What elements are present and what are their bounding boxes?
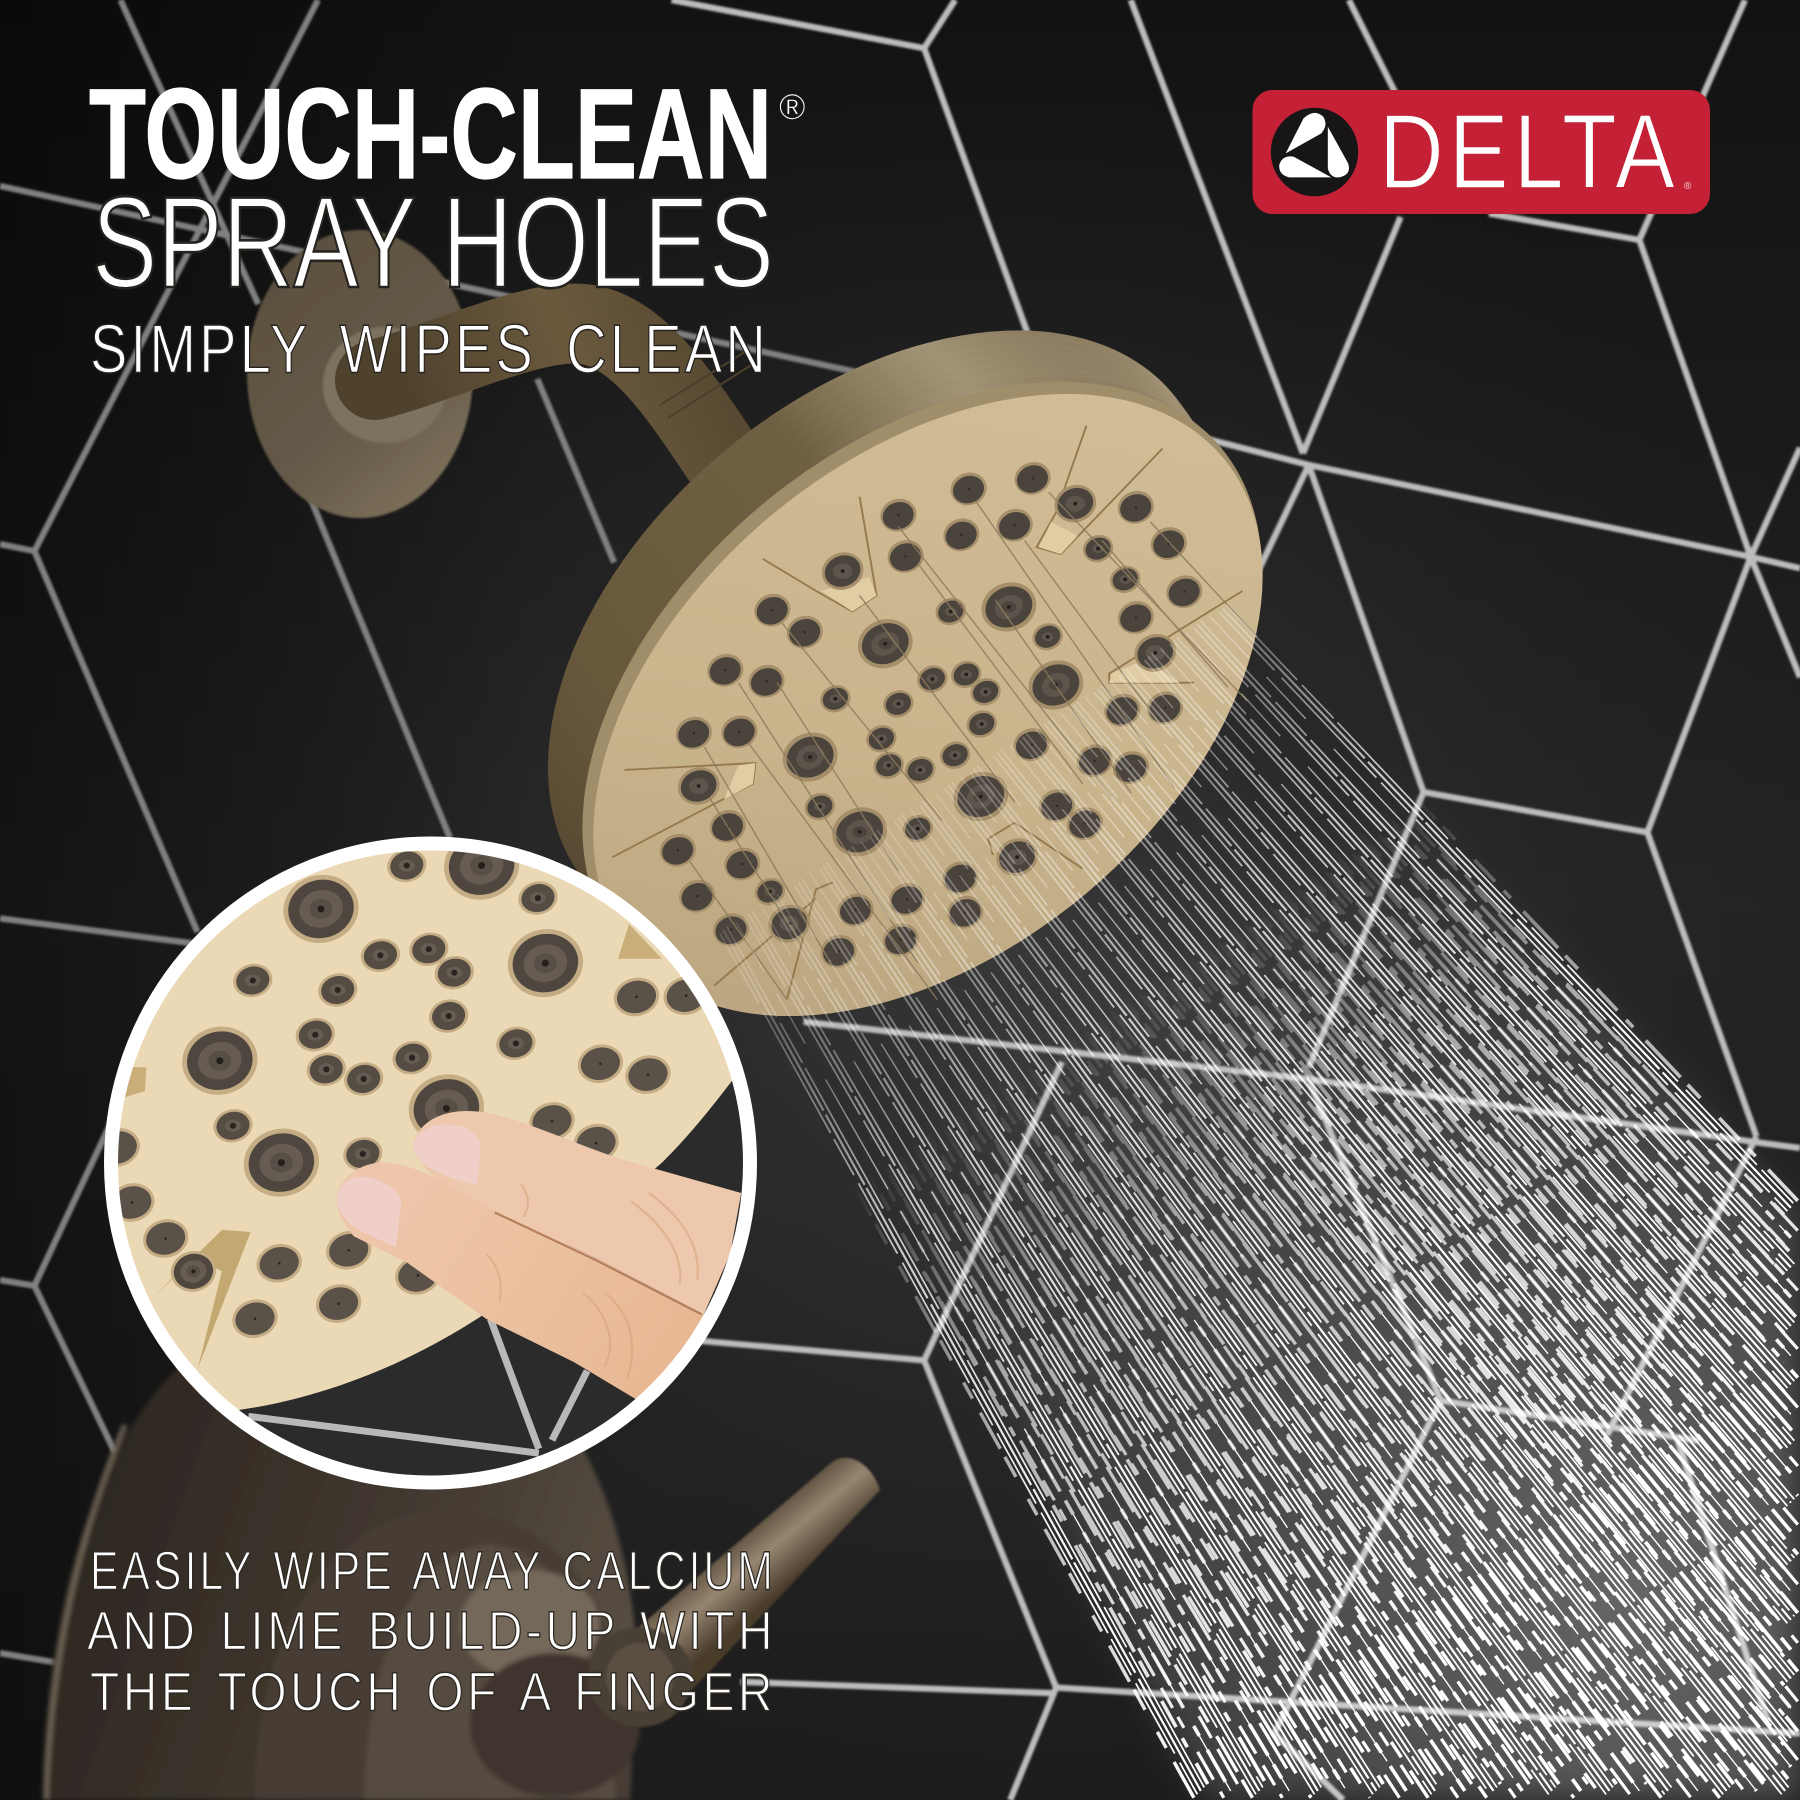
icon: Delta tri-drop mark [1271,108,1358,196]
Delta logo badge [1252,90,1710,214]
description line 1: EASILY WIPE AWAY CALCIUM [90,1540,776,1602]
description line 3: THE TOUCH OF A FINGER [90,1660,776,1722]
registered mark: ® [1684,181,1692,192]
shower valve trim plate [43,1300,640,1800]
subtitle: SIMPLY WIPES CLEAN [90,310,769,388]
callout: magnified touch-clean detail circle [90,820,780,1482]
shower head body side [431,207,1371,1127]
fingers wiping the nozzles [336,1111,741,1399]
gold wedge details [612,426,1243,999]
spray nozzles [653,456,1209,974]
title [89,63,806,388]
white callout ring [111,844,750,1482]
thin water jets over the face [690,492,1257,999]
magnified tile lines [248,1320,590,1456]
Delta wordmark: DELTA [1379,93,1680,211]
registered mark: ® [779,86,806,127]
water spray [716,602,1800,1800]
magnified shower face [118,850,732,1410]
shower arm flange [247,230,473,518]
magnified gold wedges [123,924,662,1369]
title line: Spray Holes: SPRAY HOLES [92,169,774,315]
magnified spray nozzles [90,823,713,1343]
description text block [87,1540,776,1722]
lever handle [588,1458,880,1727]
title line: Touch-Clean: TOUCH-CLEAN [89,63,772,206]
fingernails [413,1124,481,1185]
shower arm pipe [375,324,756,458]
shower head [431,207,1382,1141]
shower head face [462,255,1382,1141]
description line 2: AND LIME BUILD-UP WITH [87,1600,776,1662]
